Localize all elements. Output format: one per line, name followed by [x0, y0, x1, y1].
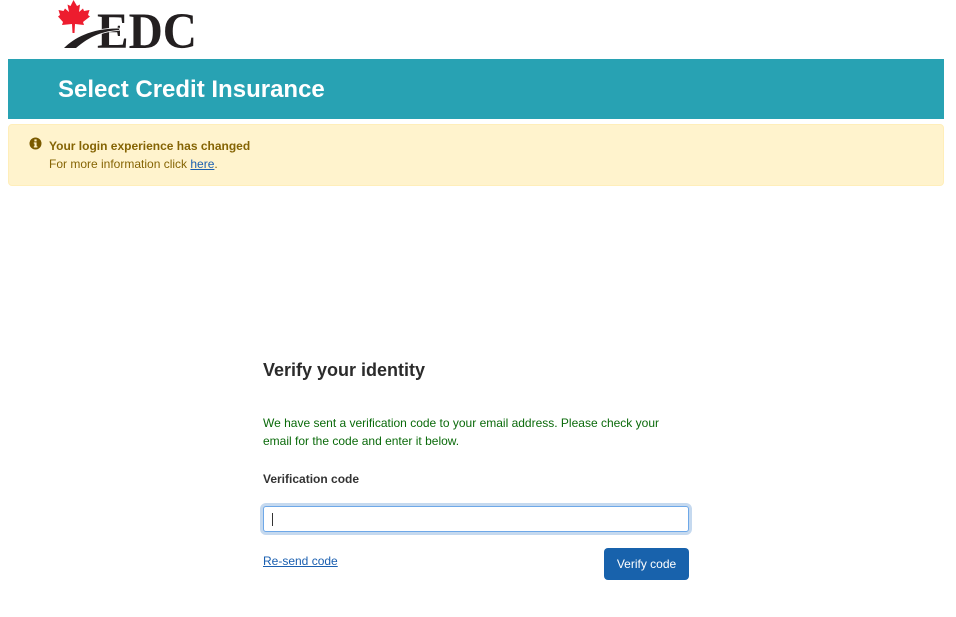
header banner — [8, 59, 944, 119]
logo: EDC with maple leaf — [58, 0, 197, 56]
verification message: We have sent a verification code to your email address. Please check your — [263, 416, 659, 430]
verification message: email for the code and enter it below. — [263, 434, 459, 448]
alert heading: Your login experience has changed — [49, 139, 250, 153]
button: verify code: Verify code — [617, 557, 676, 571]
input field — [263, 506, 689, 532]
alert panel: login notice — [8, 124, 944, 186]
text cursor — [272, 513, 273, 526]
verification message — [263, 416, 659, 448]
button: verify code — [604, 548, 689, 580]
heading: Select Credit Insurance: Select Credit Insurance — [58, 76, 325, 103]
form heading: Verify your identity — [263, 360, 425, 380]
resend link: Re-send code — [263, 554, 338, 568]
alert text: For more information click here. — [49, 157, 218, 171]
icon: red maple leaf — [58, 0, 90, 33]
field label: Verification code — [263, 472, 359, 486]
icon: info — [30, 138, 42, 150]
logo swoosh — [64, 28, 119, 48]
